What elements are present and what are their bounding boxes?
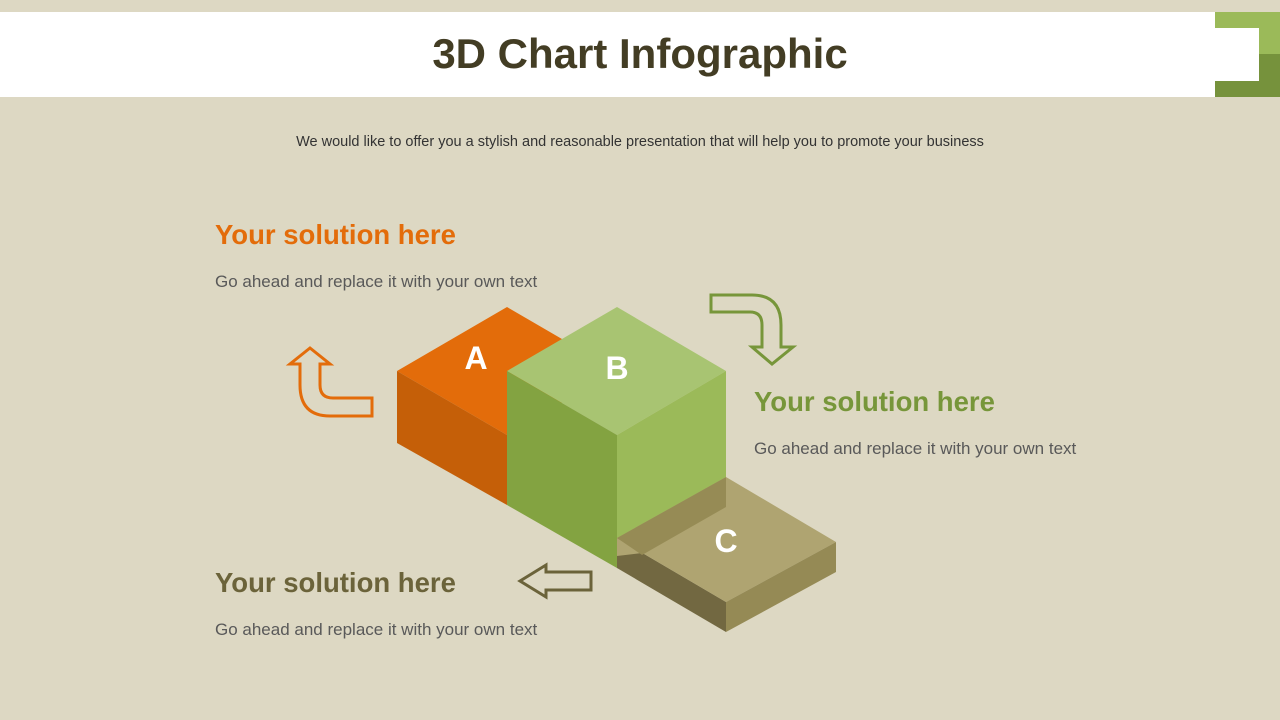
text block C: Go ahead and replace it with your own text [215,620,537,639]
header bar [0,12,1215,97]
corner decoration [1215,12,1280,97]
arrow: olive left [520,565,591,597]
text block B: Your solution here [754,386,995,417]
block A [397,307,617,505]
text block B: Go ahead and replace it with your own text [754,439,1076,458]
block B [507,307,726,568]
arrow: green down [711,295,793,364]
block C: C [714,523,738,559]
block B: B [605,350,629,386]
text block A: Go ahead and replace it with your own text [215,272,537,291]
arrow: orange up [290,348,372,416]
text block B [754,386,1076,458]
title: 3D Chart Infographic [432,30,848,77]
block C [617,477,836,632]
text block C [215,567,538,639]
subtitle: We would like to offer you a stylish and reasonable presentation that will help you to promote your business [296,134,984,150]
text block C: Your solution here [215,567,456,598]
text block A [215,219,538,291]
text block A: Your solution here [215,219,456,250]
block A: A [464,340,488,376]
